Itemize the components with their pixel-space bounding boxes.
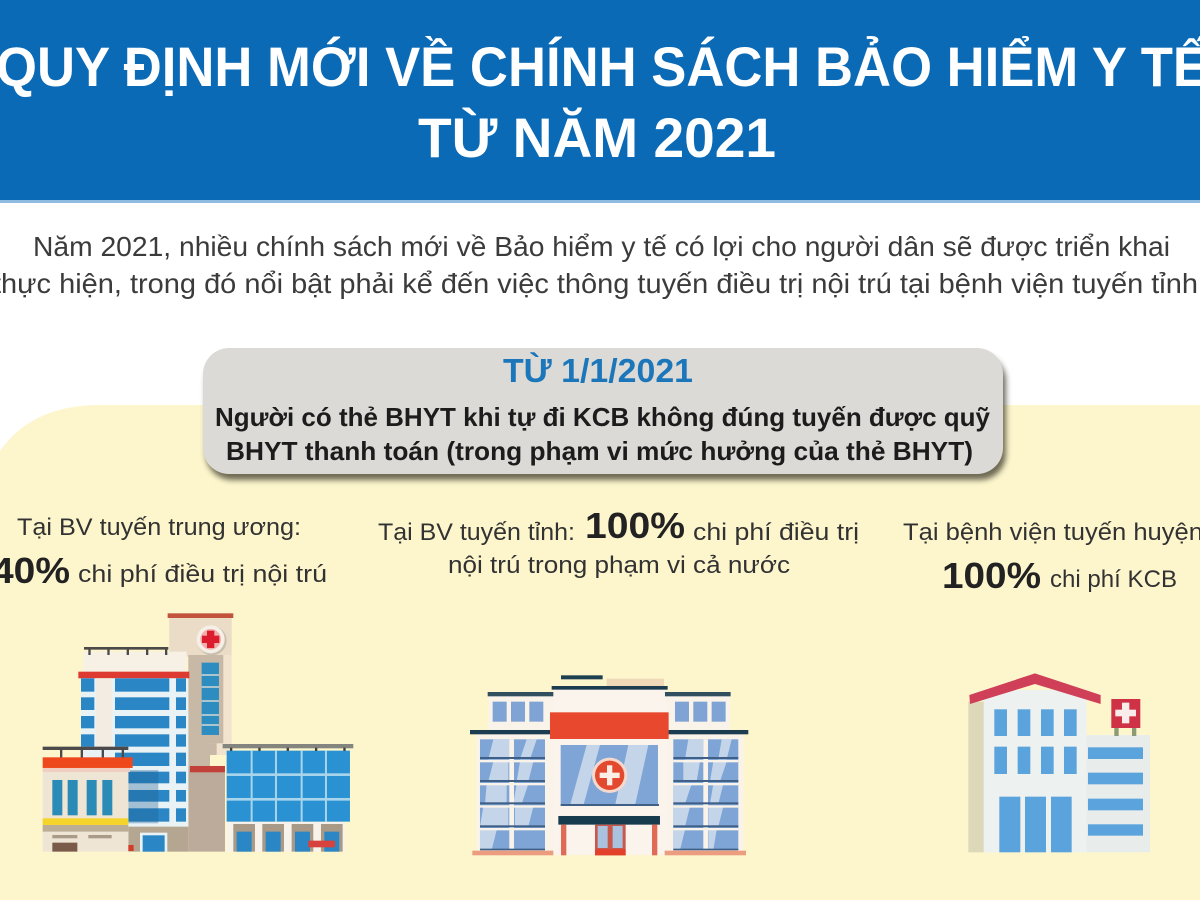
title: TỪ NĂM 2021 <box>418 106 776 169</box>
text: provincial hospital: nội trú trong phạm vi cả nước <box>448 552 790 579</box>
text: district hospital <box>903 519 1200 596</box>
callout body: BHYT thanh toán (trong phạm vi mức hưởng của thẻ BHYT) <box>226 436 973 466</box>
text: district hospital: chi phí KCB <box>1050 566 1177 593</box>
intro text: Năm 2021, nhiều chính sách mới về Bảo hiểm y tế có lợi cho người dân sẽ được triển khai <box>33 231 1170 262</box>
text: central hospital <box>0 514 327 591</box>
callout heading: TỪ 1/1/2021 <box>503 352 693 389</box>
callout body <box>215 402 991 466</box>
text: provincial hospital <box>378 505 859 579</box>
icon: provincial hospital building <box>470 675 748 855</box>
header banner <box>0 0 1200 203</box>
intro text <box>0 231 1200 299</box>
panel: yellow background <box>0 405 1200 900</box>
icon: district hospital building <box>968 673 1150 852</box>
text: provincial hospital: Tại BV tuyến tỉnh: <box>378 519 575 546</box>
text: district hospital: Tại bệnh viện tuyến huyện <box>903 519 1200 546</box>
callout body: Người có thẻ BHYT khi tự đi KCB không đúng tuyến được quỹ <box>215 402 991 432</box>
text: central hospital: Tại BV tuyến trung ương: <box>17 514 301 541</box>
icon: central hospital building <box>43 613 353 852</box>
intro text: thực hiện, trong đó nổi bật phải kể đến việc thông tuyến điều trị nội trú tại bệnh viện tuyến tỉnh. <box>0 268 1200 299</box>
text: provincial hospital: 100% <box>585 505 685 546</box>
title <box>0 35 1200 169</box>
text: provincial hospital: chi phí điều trị <box>693 519 859 546</box>
callout: from 1/1/2021 <box>203 348 1006 480</box>
text: central hospital: chi phí điều trị nội trú <box>78 561 327 588</box>
text: district hospital: 100% <box>942 555 1041 596</box>
